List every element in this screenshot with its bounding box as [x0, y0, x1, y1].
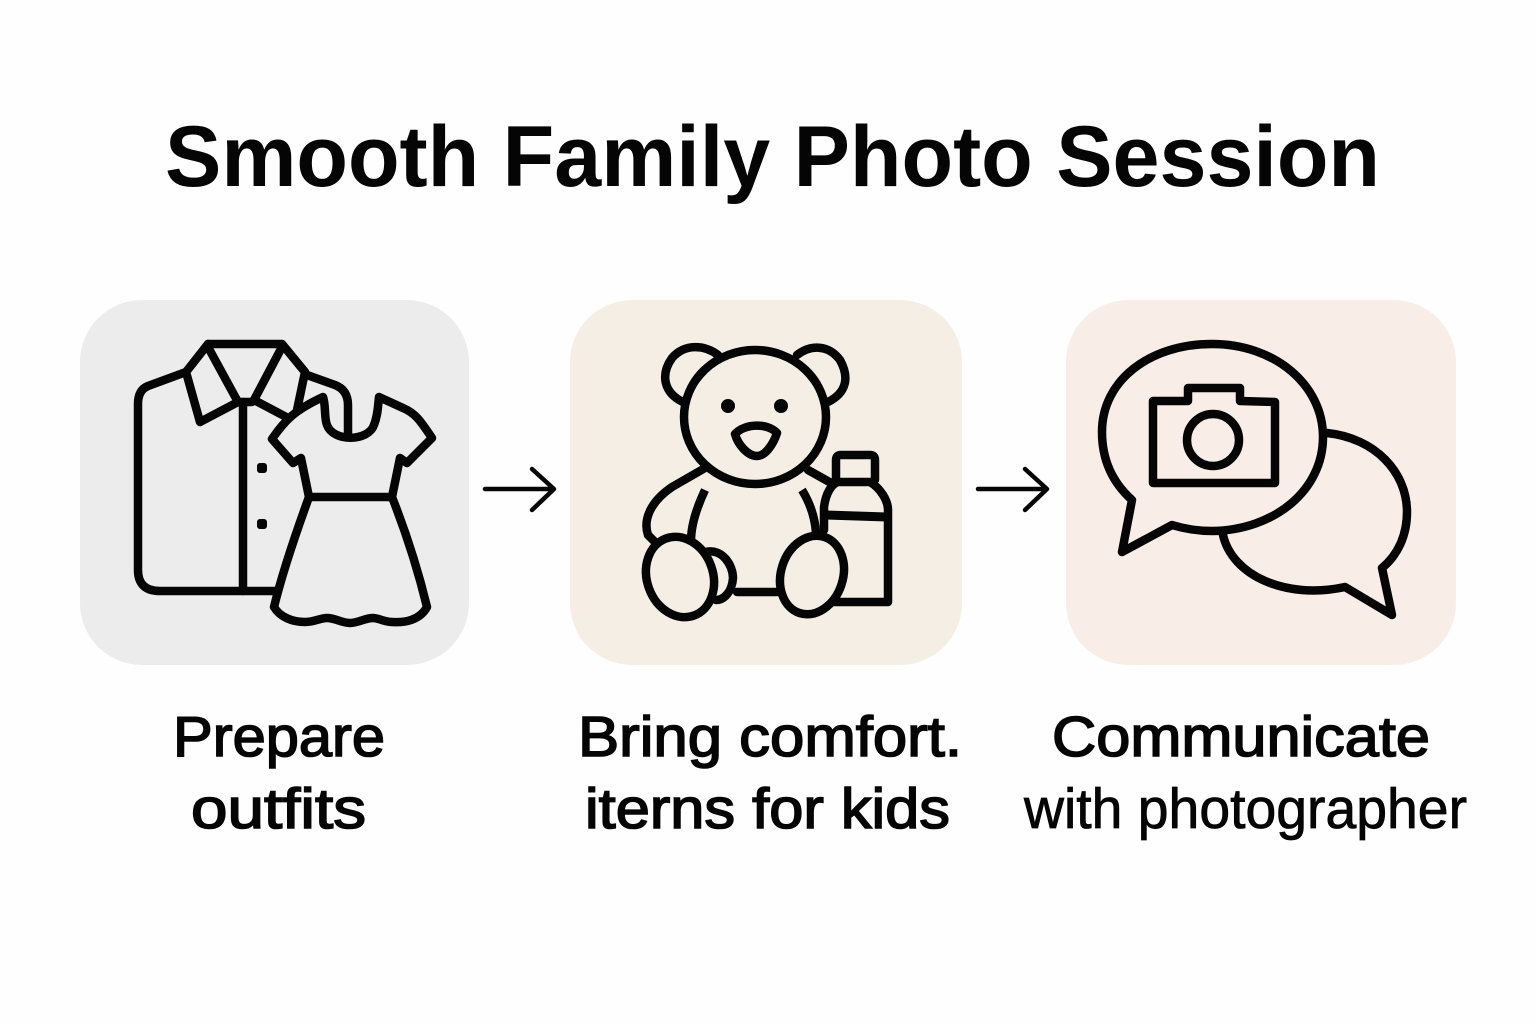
icon: teddy bear [635, 347, 888, 627]
label: bring comfort items: iterns for kids [585, 777, 950, 841]
label: communicate with photographer [1023, 705, 1467, 841]
panel: communicate with photographer [1066, 300, 1456, 665]
arrow: step two to step three [978, 469, 1047, 510]
icon: dress [272, 397, 432, 623]
label: communicate with photographer: with photographer [1023, 777, 1467, 841]
label: bring comfort items [578, 705, 962, 841]
panel: prepare outfits [80, 300, 469, 665]
icon: camera [1153, 388, 1275, 483]
panel: bring comfort items [570, 300, 962, 665]
icon: bottle [824, 455, 888, 602]
icon: front speech bubble [1102, 344, 1323, 552]
label: prepare outfits: Prepare [173, 705, 385, 769]
title: Smooth Family Photo Session [165, 109, 1380, 205]
label: communicate with photographer: Communicate [1052, 705, 1430, 769]
icon: shirt [138, 344, 348, 591]
arrow: step one to step two [485, 469, 554, 510]
icon: back speech bubble [1223, 433, 1407, 615]
label: bring comfort items: Bring comfort. [578, 705, 962, 769]
label: prepare outfits: outfits [191, 777, 366, 841]
label: prepare outfits [173, 705, 385, 841]
